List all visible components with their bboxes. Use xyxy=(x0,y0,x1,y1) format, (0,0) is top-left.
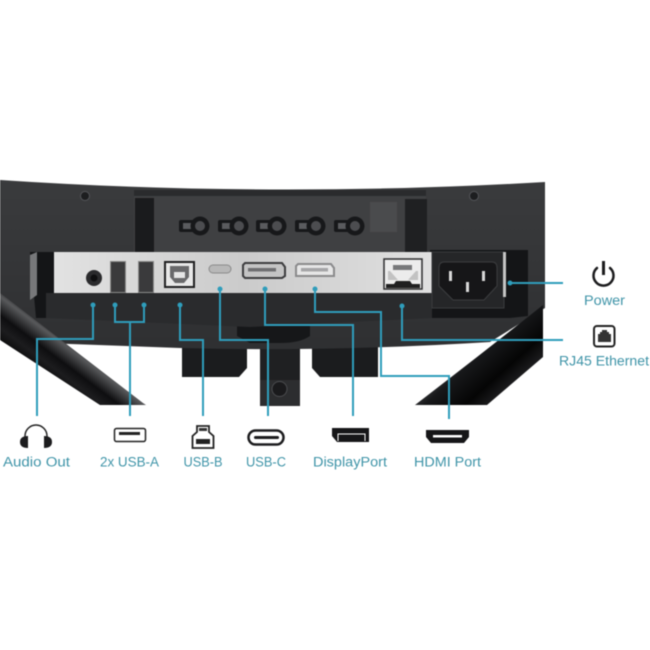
USB-A ports xyxy=(110,262,154,292)
line: power xyxy=(510,282,563,284)
label: HDMI Port: HDMI Port xyxy=(414,454,481,470)
stand neck xyxy=(237,323,310,343)
line: audio xyxy=(37,305,93,416)
HDMI port xyxy=(296,264,334,276)
monitor body xyxy=(0,180,545,349)
line: USB-B xyxy=(180,305,203,416)
upper recess xyxy=(134,192,426,252)
stand blocks xyxy=(182,340,378,406)
power socket xyxy=(432,252,506,308)
left leg xyxy=(0,293,146,405)
icon: power xyxy=(594,261,614,286)
line: RJ45 xyxy=(402,306,563,340)
VESA mounts xyxy=(179,216,364,236)
icon: USB-A xyxy=(114,428,146,442)
port bay shadow xyxy=(30,250,528,318)
label: USB-B: USB-B xyxy=(184,454,222,470)
RJ45 port xyxy=(384,259,422,289)
line: DisplayPort xyxy=(265,289,353,416)
icon: USB-B xyxy=(192,426,214,448)
label: RJ45 Ethernet: RJ45 Ethernet xyxy=(559,354,649,368)
USB-B port xyxy=(165,262,194,287)
lower lip xyxy=(46,293,432,327)
line: HDMI xyxy=(315,289,449,419)
callout dots xyxy=(90,280,512,308)
label: USB-C: USB-C xyxy=(246,454,286,470)
label: Audio Out: Audio Out xyxy=(3,454,70,470)
label: Power: Power xyxy=(584,293,626,308)
icon: headphones xyxy=(20,425,52,448)
USB-C port xyxy=(209,265,231,273)
silver port panel xyxy=(54,252,432,293)
label: DisplayPort: DisplayPort xyxy=(313,454,387,470)
callout lines xyxy=(37,283,563,419)
labels xyxy=(3,293,649,470)
line: USB-A xyxy=(115,305,144,416)
icon: RJ45 xyxy=(594,326,614,346)
label: 2x USB-A: 2x USB-A xyxy=(100,454,159,470)
icon: DisplayPort xyxy=(332,428,369,442)
screws xyxy=(80,192,478,200)
icon: USB-C xyxy=(248,430,284,444)
right leg xyxy=(415,305,543,405)
monitor rear xyxy=(0,180,545,406)
DisplayPort port xyxy=(243,263,285,278)
icon: HDMI xyxy=(426,430,469,443)
line: USB-C xyxy=(220,289,268,416)
audio jack xyxy=(86,270,102,286)
